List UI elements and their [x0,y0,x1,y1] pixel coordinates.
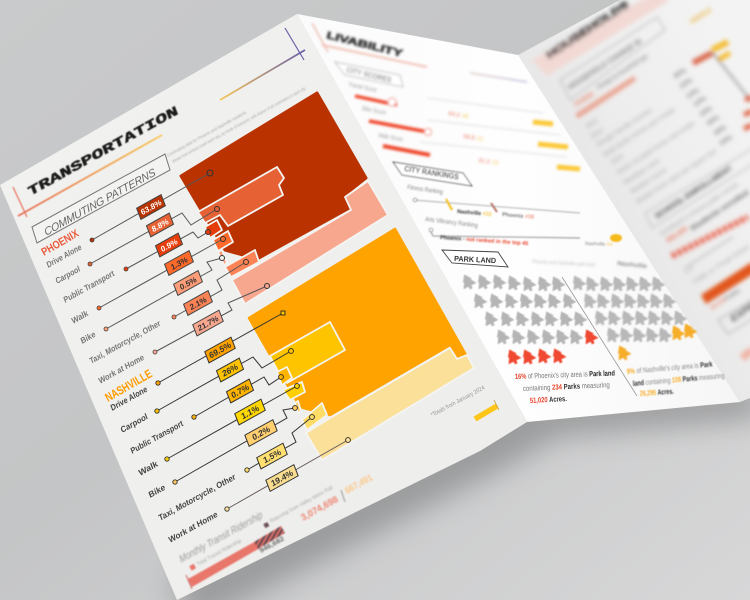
enrollment rows: 1.1 [683,264,695,276]
block: nashville carpool [270,322,345,383]
heading: livability: LIVABILITY [325,30,404,60]
phoenix park land text [515,369,615,405]
list of categories: 2021 [584,117,600,131]
row: phoenix work at home [97,284,270,386]
block: nashville public transport [277,367,292,385]
percent column: 18% [712,124,729,138]
row: nashville work at home [167,438,350,545]
box: city rankings: CITY RANKINGS [404,164,460,182]
enrollment rows: 995,000 [665,226,689,245]
phoenix rows wrapper [40,170,270,386]
row: phoenix drive alone [45,170,213,270]
percent column: 12% [678,77,695,91]
row: nashville carpool: Carpool [119,411,149,435]
row: phoenix work at home: 21.7% [197,314,220,333]
nashville park land text [626,359,725,398]
block: public transport [205,220,222,238]
block: nashville drive alone [249,229,466,415]
percent column: 13% [685,87,702,101]
park land captions [532,259,648,270]
walk score bar: Walk Score [378,133,404,143]
heading: right page title band: HOUSEHOLDS [545,0,632,61]
transit score bar: Transit Score [348,82,378,94]
phoenix tree pictogram [458,271,600,367]
transit score bar: 64.238 [448,111,469,121]
row: nashville work at home: Work at Home [167,509,219,545]
Phoenix legend row: Change by household type [595,53,650,92]
phoenix park land text: 16% of Phoenix's city area is Park land [515,369,615,381]
box: commuting patterns: COMMUTING PATTERNS [43,166,158,239]
row: phoenix walk: Walk [70,308,90,326]
legend: total: Total Transit Ridership [196,538,243,568]
list of categories: 2022 [589,127,605,141]
row: phoenix bike: 0.5% [179,275,198,292]
nashville park land text: land containing 108 Parks measuring [632,371,725,388]
heading: monthly transit ridership: Monthly Transit Ridership [178,510,264,566]
box: household change: HOUSEHOLD CHANGE IN [566,37,644,92]
park land captions: Nashville [617,261,648,270]
center lower content [393,162,622,248]
box: city rankings [393,162,472,186]
walk score bar [378,133,580,169]
box: expenses [718,286,750,358]
row: phoenix walk [70,236,226,326]
phoenix park land text: 51,020 Acres. [530,394,567,405]
block: nashville work at home [306,348,474,460]
row: phoenix taxi and other [88,260,249,366]
row: nashville walk: 1.1% [240,402,261,421]
arts vibrancy ranking [425,216,622,248]
row: nashville public transport: Public Transport [129,418,184,456]
transit ridership section: 3,074,698 [299,494,340,524]
list of categories: Multi family homes and rentals [602,106,677,159]
block: nashville walk [283,382,305,400]
park land captions: Phoenix and Nashville park land [532,259,595,268]
percent column: 16% [705,114,722,128]
row: nashville carpool [119,349,293,435]
percent column: 19% [718,134,735,148]
Phoenix legend row: PHOENIX [573,91,596,109]
arts vibrancy ranking: Arts Vibrancy Ranking [425,216,479,229]
row: phoenix carpool: 8.8% [151,217,170,234]
transit score bar [348,82,553,124]
block: work at home [232,181,388,304]
title: transportation: TRANSPORTATION [26,103,180,200]
row: phoenix drive alone: Drive Alone [45,242,83,270]
transit ridership section [178,472,375,589]
top right accent lines [220,28,305,100]
row: phoenix taxi and other: 2.1% [189,295,208,312]
nashville tree pictogram [568,272,699,363]
arts vibrancy ranking: Phoenix - not ranked in the top 45 [440,235,528,247]
block: nashville bike [295,401,301,413]
row: nashville public transport: 0.7% [230,381,251,400]
title: transportation [13,103,180,217]
list of categories: Median home value per square foot [635,148,718,206]
block: drive alone [181,93,366,259]
row: nashville public transport [129,375,283,456]
nashville heading: NASHVILLE [102,366,155,405]
heading: livability [312,23,527,82]
diverging bars [689,7,750,129]
box: commuting patterns [32,154,170,243]
legend: valley metro rail: Ridership from Valley Metro Rail [269,485,334,525]
box: household change [560,17,665,100]
list of categories: Median home [629,167,668,196]
bike score bar [362,106,568,147]
block: nashville taxi and other [302,403,327,430]
percent column: 14% [692,95,709,109]
row: nashville work at home: 19.4% [270,467,295,488]
orange enrollment bar: 95.0% [710,297,728,312]
row: nashville drive alone [109,311,285,413]
phoenix heading: PHOENIX [40,227,81,259]
row: nashville drive alone: 69.5% [208,339,233,360]
row: nashville bike: Bike [147,482,167,500]
row: nashville carpool: 26% [221,361,240,379]
orange enrollment bar: Public [724,287,743,303]
walk score bar: 41.333 [478,158,499,167]
nashville park land text: 26,295 Acres. [640,387,674,398]
fitness ranking: Phoenix #38 [502,212,534,221]
percent column: 15% [698,105,715,119]
row: phoenix walk: 1.3% [170,255,189,272]
box: city scores [335,62,403,87]
stacked ridership bar [186,526,285,589]
intro paragraph [166,86,307,164]
bike score bar: Bike Score [362,106,387,117]
intro paragraph: Commuting data for Phoenix and Nashville residents [166,110,248,158]
Phoenix legend row [573,53,650,116]
list of categories: Owner occupied homes and rentals [615,120,697,177]
ridership numbers: 946,682 [259,535,286,555]
row: nashville walk: Walk [137,458,159,478]
row: phoenix public transport: 0.9% [160,237,179,254]
block: walk [213,231,233,251]
box: school enrollment: SCHOOL ENROLLMENT [653,164,734,221]
row: phoenix drive alone: 63.8% [140,198,163,217]
heading: right page title band [532,0,670,76]
panel: right page [518,0,750,402]
row: nashville bike [147,406,297,500]
nashville rows wrapper [102,311,350,545]
footnote: *Totals from January 2024 [430,385,486,419]
bike score bar: 58.831 [463,134,484,143]
box: park land [442,250,508,267]
panel: left page [0,14,527,600]
enrollment rows: Students enrolled [689,189,750,233]
treemap: nashville [249,229,474,460]
list of categories [584,106,718,206]
row: phoenix carpool: Carpool [54,263,81,286]
row: nashville drive alone: Drive Alone [109,384,149,413]
box: city scores: CITY SCORES [346,65,392,84]
box: school enrollment [645,144,750,228]
arts vibrancy ranking: Nashville #4 [585,241,613,248]
yellow accent mark [475,400,499,419]
percent column: 30% [672,67,689,81]
divider between cities [562,277,637,396]
block: taxi and other [225,250,259,277]
block: bike [218,250,227,265]
phoenix park land text: containing 234 Parks measuring [523,380,610,393]
row: phoenix bike [79,256,225,346]
row: nashville taxi and other [157,415,314,523]
list of categories: Median rent [622,158,661,187]
fitness ranking [407,184,580,221]
intro paragraph: shows how workers travel each day, by mode of transport, with shares of all commuters in each city [171,86,307,164]
row: nashville walk [137,384,299,478]
row: nashville bike: 0.2% [251,423,272,442]
fitness ranking: Fitness Ranking [407,184,444,196]
center upper blurred content [312,23,580,169]
right page blurred content [532,0,750,358]
box: park land: PARK LAND [454,254,497,265]
percent column [672,67,735,148]
panel: center page [297,14,740,422]
row: phoenix taxi and other: Taxi, Motorcycle, Other [88,317,162,366]
treemap: phoenix [181,93,388,304]
list of categories: 2023 [609,153,625,167]
transit ridership section: 667,491 [343,472,375,497]
row: phoenix carpool [54,206,220,286]
row: nashville taxi and other: 1.5% [262,446,283,465]
block: carpool [198,167,284,226]
enrollment rows [659,181,750,276]
row: phoenix public transport: Public Transport [62,268,116,305]
paper shadow [170,385,750,600]
row: phoenix public transport [62,230,211,305]
fitness ranking: Nashville #22 [457,209,492,218]
row: phoenix bike: Bike [79,329,97,346]
row: nashville taxi and other: Taxi, Motorcycle, Other [157,471,237,523]
orange enrollment bar [692,244,750,312]
list of categories: Single family homes [595,107,654,149]
nashville park land text: 9% of Nashville's city area is Park [626,359,713,376]
row: phoenix work at home: Work at Home [97,352,146,386]
